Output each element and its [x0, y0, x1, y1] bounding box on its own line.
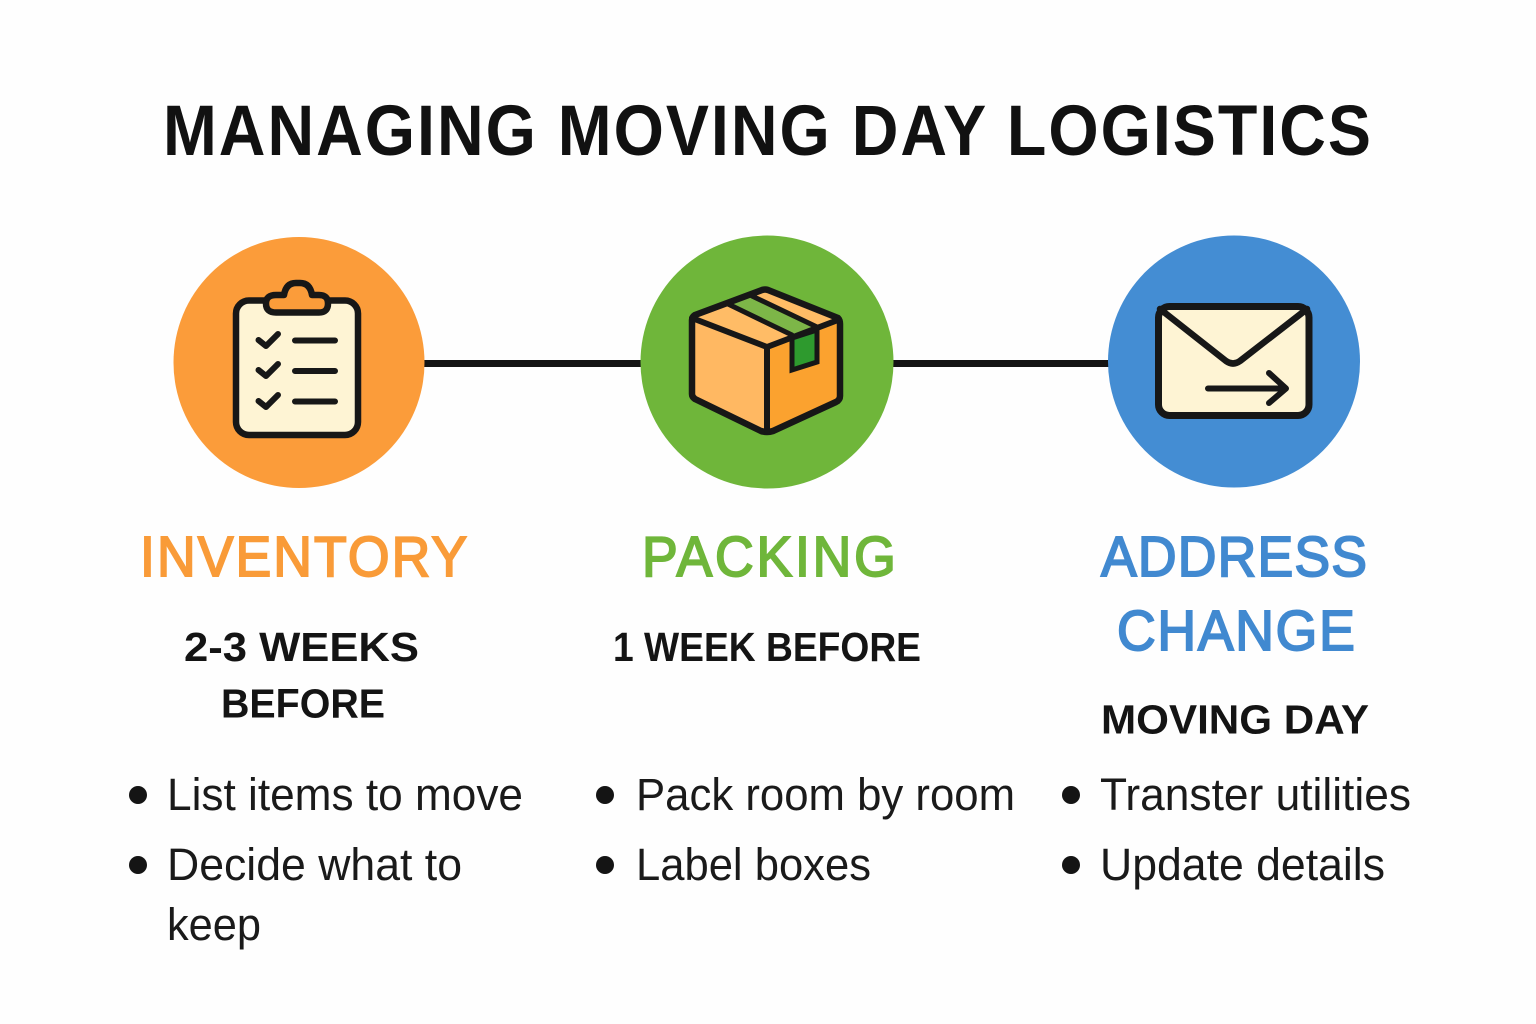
timing: 2-3 weeks before: 2-3 WEEKS [184, 624, 419, 670]
heading: packing: PACKING [642, 524, 896, 588]
icon: envelope with arrow [1108, 236, 1360, 488]
timing: 1 week before: 1 WEEK BEFORE [613, 624, 921, 670]
timing: 2-3 weeks before: BEFORE [221, 680, 385, 726]
icon: clipboard checklist [174, 237, 424, 488]
checklist: inventory tasks [129, 769, 523, 950]
timing: moving day: MOVING DAY [1101, 696, 1369, 742]
heading: address change: ADDRESS [1101, 524, 1367, 588]
icon: cardboard box [640, 236, 894, 488]
heading: inventory: INVENTORY [140, 524, 467, 588]
checklist: address tasks: Update details [1100, 839, 1385, 890]
heading: address change [1101, 524, 1367, 662]
timing: 2-3 weeks before [184, 624, 419, 726]
heading: address change: CHANGE [1117, 598, 1355, 662]
title: MANAGING MOVING DAY LOGISTICS [163, 92, 1371, 171]
checklist: packing tasks [596, 769, 1015, 890]
checklist: address tasks: Transter utilities [1100, 769, 1411, 820]
checklist: packing tasks: Pack room by room [636, 769, 1015, 820]
checklist: packing tasks: Label boxes [636, 839, 871, 890]
checklist: address tasks [1062, 769, 1411, 890]
checklist: inventory tasks: keep [167, 899, 261, 950]
connector: inventory to packing [420, 360, 645, 367]
panel: packing [596, 236, 1015, 890]
panel: address change [1062, 236, 1411, 890]
panel: inventory [129, 237, 523, 950]
checklist: inventory tasks: List items to move [167, 769, 523, 820]
connector: packing to address change [890, 360, 1112, 367]
checklist: inventory tasks: Decide what to [167, 839, 462, 890]
